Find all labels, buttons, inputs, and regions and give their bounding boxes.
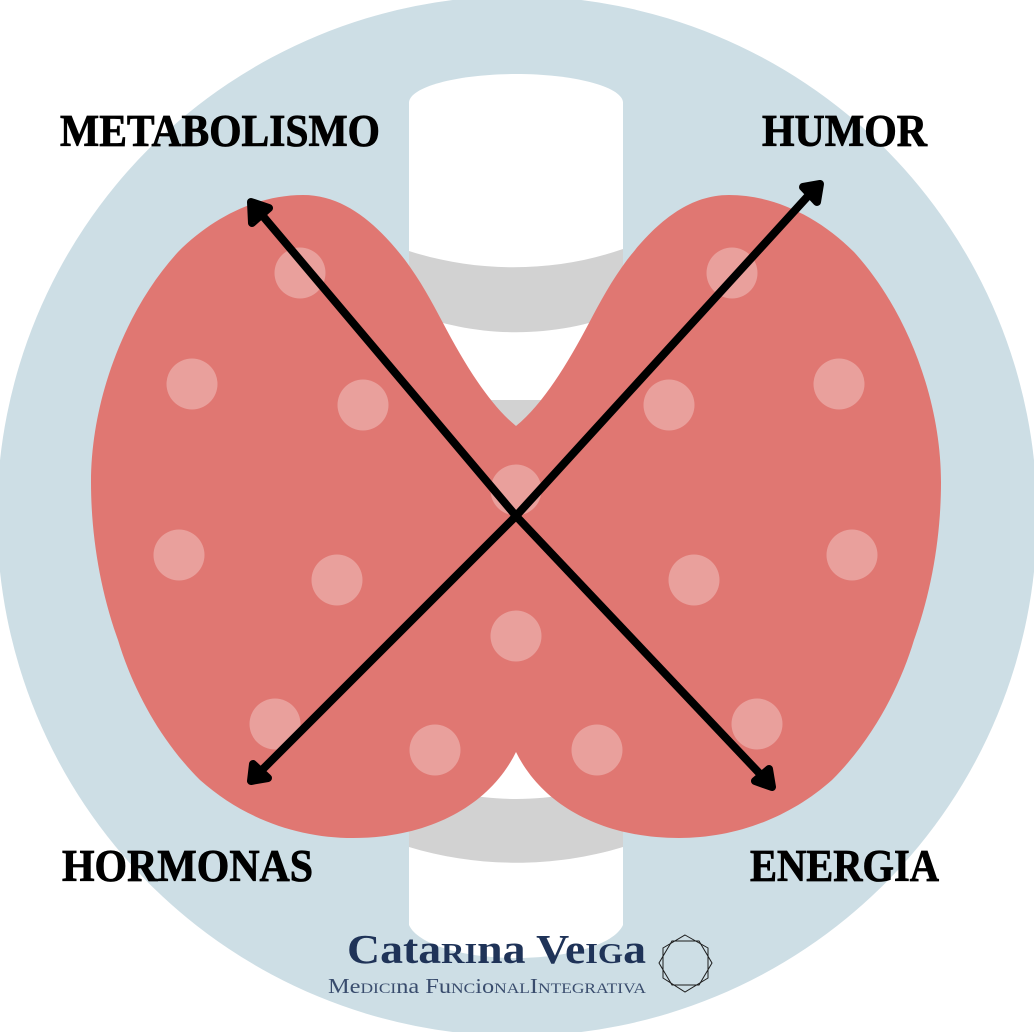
cartilage ring upper: [409, 249, 623, 332]
logo name: Catarina Ve iga: [347, 926, 646, 972]
icon: double hexagon: [659, 935, 712, 992]
trachea tube: [409, 74, 623, 958]
logo subtitle: Medicina Fu ncionalIntegrativa: [328, 974, 646, 998]
arrow: energia: [516, 516, 772, 787]
label: metabolismo: METABOLISMO: [60, 106, 380, 156]
cartilage ring lower: [409, 778, 623, 863]
thyroid gland: [91, 195, 941, 838]
label: hormonas: HORMONAS: [62, 841, 313, 891]
arrow: hormonas: [251, 516, 516, 781]
label: humor: HUMOR: [762, 106, 927, 156]
arrow: humor: [516, 184, 820, 516]
logo brand: [328, 926, 712, 998]
cartilage ring middle: [470, 400, 560, 440]
arrow: metabolismo: [251, 202, 516, 516]
label: energia: ENERGIA: [750, 841, 939, 891]
thyroid follicle dots: [154, 248, 878, 776]
trachea: [409, 74, 623, 958]
